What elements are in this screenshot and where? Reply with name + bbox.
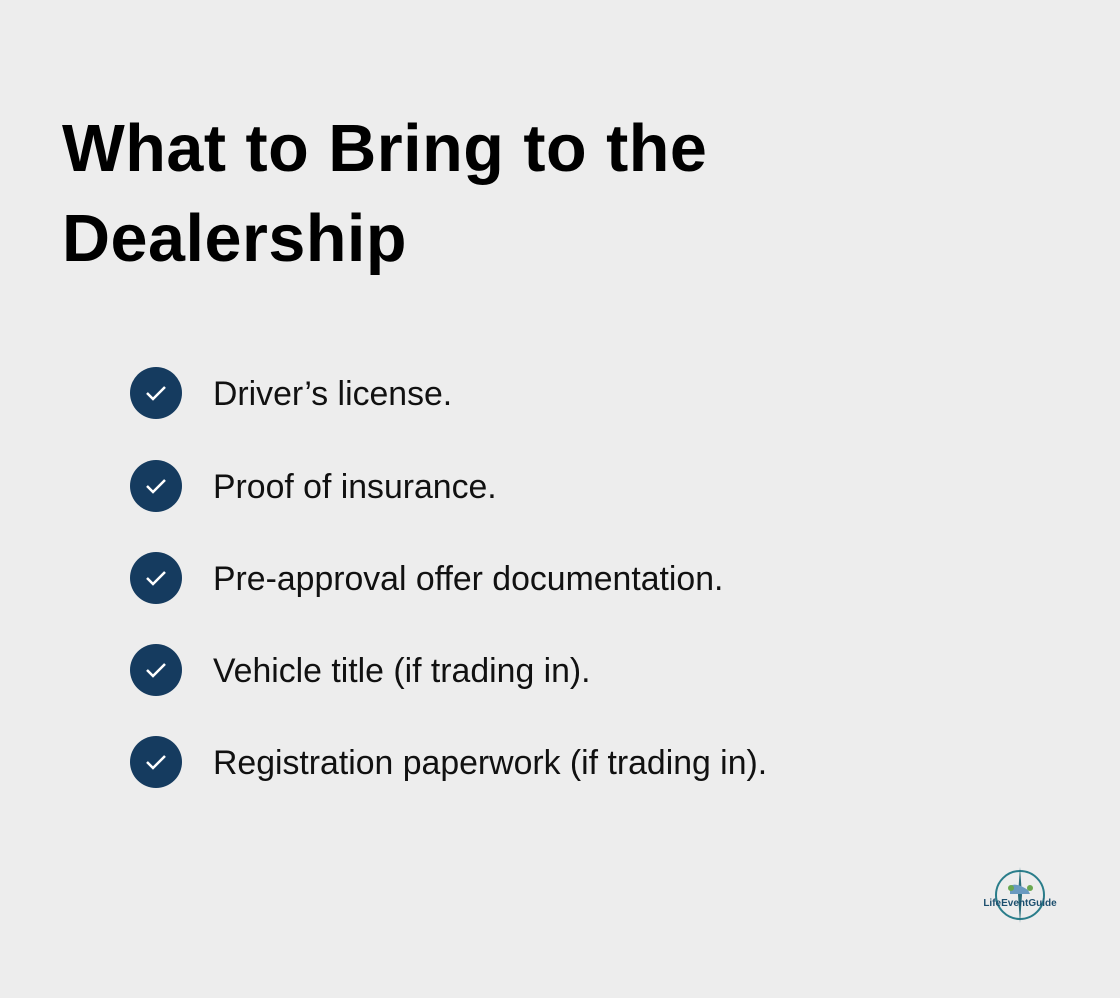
item 4 <box>130 644 591 696</box>
title: Dealership <box>62 202 407 276</box>
item 2: Proof of insurance. <box>213 468 497 506</box>
item 3: Pre-approval offer documentation. <box>213 560 723 598</box>
logo <box>983 868 1057 922</box>
item 1 <box>130 367 452 419</box>
item 5: Registration paperwork (if trading in). <box>213 744 767 782</box>
item 3 <box>130 552 723 604</box>
item 1: Driver’s license. <box>213 375 452 413</box>
logo: LifeEventGuide <box>983 898 1057 909</box>
title: What to Bring to the <box>62 112 707 186</box>
title <box>62 112 707 276</box>
item 5 <box>130 736 767 788</box>
item 2 <box>130 460 497 512</box>
item 4: Vehicle title (if trading in). <box>213 652 591 690</box>
checklist <box>130 367 767 788</box>
